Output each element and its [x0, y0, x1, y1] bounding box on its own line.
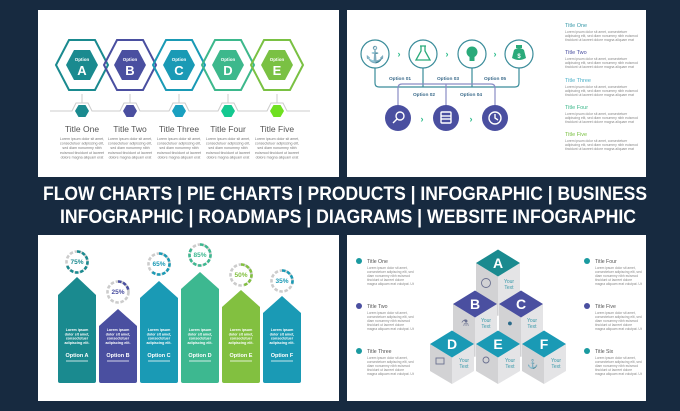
option labels — [389, 76, 506, 98]
hexagon row — [56, 40, 303, 90]
panel: cube pyramid: Your — [505, 358, 515, 364]
arrows: › — [470, 114, 472, 124]
panel: arrow bars — [38, 235, 339, 401]
panel: cube pyramid: Your — [481, 318, 491, 324]
text column: Title Three — [565, 78, 591, 84]
connectors — [375, 68, 519, 105]
panel: hexagon options: Option — [172, 57, 186, 62]
panel: cube pyramid: F — [540, 336, 549, 352]
titles: Title One — [65, 124, 99, 134]
icon circles — [361, 40, 533, 68]
percentage rings — [66, 244, 292, 302]
side titles — [356, 258, 590, 354]
panel: flow options — [347, 10, 646, 177]
panel: cube pyramid: E — [493, 336, 503, 352]
panel: hexagon options: C — [174, 63, 184, 78]
panel: cube pyramid: Text — [459, 364, 469, 370]
panel: cube pyramid — [347, 235, 646, 401]
panel: cube pyramid: Your — [551, 358, 561, 364]
panel: cube pyramid: Title One — [367, 259, 388, 265]
text column: Title One — [565, 23, 587, 29]
titles — [65, 124, 294, 134]
panel: cube pyramid: Title Six — [595, 349, 614, 355]
arrows: › — [420, 114, 424, 124]
text column: Title Two — [565, 50, 587, 56]
timeline — [50, 94, 310, 117]
option labels: Option 02 — [413, 92, 435, 98]
cubes — [430, 250, 566, 384]
panel: arrow bars: 35% — [275, 278, 289, 285]
panel: hexagon options — [38, 10, 339, 177]
panel: cube pyramid: Title Three — [367, 349, 392, 355]
panel: hexagon options: Option — [75, 57, 89, 62]
panel: arrow bars: Option B — [106, 353, 130, 359]
panel: arrow bars: 75% — [70, 259, 84, 266]
panel: arrow bars: Option E — [230, 353, 253, 359]
option labels: Option 04 — [460, 92, 482, 98]
panel: cube pyramid: Text — [527, 324, 537, 330]
panel: cube pyramid: Title Four — [595, 259, 617, 265]
panel: hexagon options: Option — [221, 57, 235, 62]
arrows: › — [446, 49, 448, 59]
panel: cube pyramid: Your — [504, 279, 514, 285]
panel: cube pyramid: Text — [481, 324, 491, 330]
panel: arrow bars: Option F — [271, 353, 294, 359]
titles: Title Three — [159, 124, 199, 134]
panel: cube pyramid: ⚗ — [461, 318, 469, 328]
titles: Title Five — [260, 124, 294, 134]
panel: arrow bars: Option D — [188, 353, 212, 359]
panel: cube pyramid: C — [516, 296, 526, 312]
panel: hexagon options: A — [77, 63, 87, 78]
text column: Title Four — [565, 105, 588, 111]
purple circles — [385, 105, 508, 131]
banner heading — [43, 184, 647, 228]
panel: arrow bars: 85% — [193, 252, 207, 259]
panel: arrow bars: Option A — [65, 353, 89, 359]
panel: cube pyramid: Your — [459, 358, 469, 364]
panel: cube pyramid: Your — [527, 318, 537, 324]
panel: cube pyramid: B — [470, 296, 480, 312]
panel: hexagon options: B — [125, 63, 135, 78]
panel: cube pyramid: Text — [551, 364, 561, 370]
option labels: Option 03 — [437, 76, 459, 82]
panel: cube pyramid: Title Five — [595, 304, 616, 310]
panel: arrow bars: Option C — [147, 353, 171, 359]
titles: Title Four — [210, 124, 246, 134]
panel: hexagon options: Option — [270, 57, 284, 62]
arrows: › — [398, 49, 400, 59]
panel: hexagon options: D — [223, 63, 233, 78]
panel: arrow bars: 25% — [111, 289, 125, 296]
banner heading: FLOW CHARTS | PIE CHARTS | PRODUCTS | INFOGRAPHIC | BUSINESS — [43, 184, 647, 205]
bars — [58, 272, 301, 383]
panel: hexagon options: E — [273, 63, 282, 78]
panel: flow options: $ — [517, 54, 521, 60]
option labels: Option 01 — [389, 76, 411, 82]
panel: cube pyramid: A — [493, 255, 503, 271]
arrows — [398, 49, 496, 124]
text column: Title Five — [565, 132, 587, 138]
arrows: › — [494, 49, 496, 59]
banner heading: INFOGRAPHIC | ROADMAPS | DIAGRAMS | WEBSITE INFOGRAPHIC — [60, 207, 636, 228]
panel: cube pyramid: Title Two — [367, 304, 388, 310]
panel: cube pyramid: D — [447, 336, 457, 352]
option labels: Option 05 — [484, 76, 506, 82]
titles: Title Two — [113, 124, 147, 134]
panel: hexagon options: Option — [123, 57, 137, 62]
panel: cube pyramid: ⚓ — [527, 358, 539, 369]
panel: cube pyramid: Text — [505, 364, 515, 370]
panel: arrow bars: 65% — [152, 261, 166, 268]
text column — [565, 23, 591, 138]
panel: arrow bars: 50% — [234, 272, 248, 279]
panel: cube pyramid: Text — [504, 285, 514, 291]
panel: cube pyramid: ● — [507, 318, 513, 328]
panel: flow options: ⚓ — [365, 45, 385, 64]
